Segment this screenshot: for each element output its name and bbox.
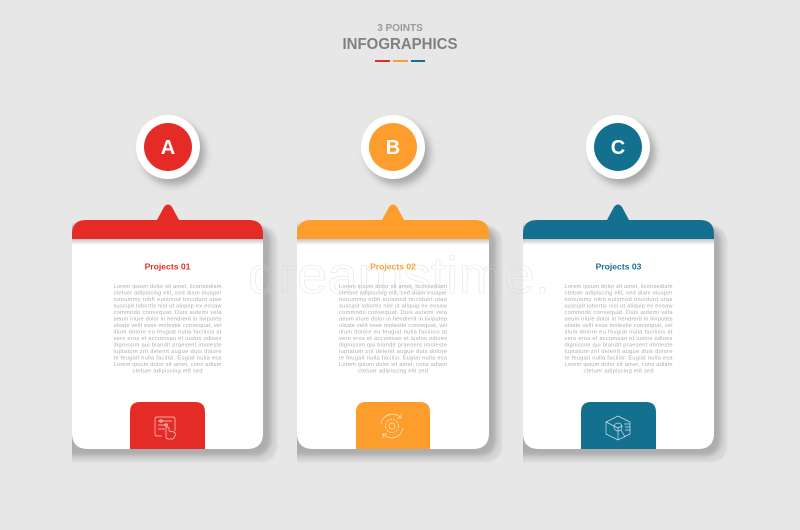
body text: illum dolore eu feugiat nulla facilisis at: [339, 330, 447, 336]
header shadow: [72, 239, 263, 245]
body text: Lorem ipsum dolor sit amet, cons adiam: [564, 362, 673, 368]
card shadow: [500, 226, 727, 462]
body text: aeum iriure dolor in hendrerit in liviputep: [564, 316, 672, 322]
body text: ulsate velit esse molestie consequat, vel: [339, 323, 447, 329]
body text: te feugait nulla facilisi. Eugiat nulla esa: [114, 356, 222, 362]
card title: Projects 02: [370, 262, 416, 272]
body text: dignissim qui blandit praesent imoleste: [564, 342, 672, 348]
badge C: [586, 115, 655, 185]
body text: te feugait nulla facilisi. Eugiat nulla esa: [564, 356, 673, 362]
body text: Lorem ipsum dolor sit amet, liconsediam: [114, 284, 222, 290]
body text: ctetuer adipiscing elit, sed diam eiusper: [339, 290, 447, 296]
badge A: A: [161, 137, 175, 159]
body text: illum dolore eu feugiat nulla facilisis at: [564, 330, 673, 336]
body text: [114, 284, 222, 374]
card shadow: [275, 226, 502, 462]
badge B: [361, 115, 430, 185]
header bar with pointer: [72, 204, 263, 239]
body text: luptatum zril delenit augue duis dolore: [564, 349, 672, 355]
icon: gear cycle: [381, 414, 403, 438]
body text: nonummy nibh euismod tincidunt utae: [114, 297, 222, 303]
watermark: dreamstime.: [248, 247, 550, 305]
body text: vero eros et accumsan et iustos odioes: [564, 336, 673, 342]
badge A: [136, 115, 205, 185]
header shadow: [297, 239, 489, 245]
body text: ctetuer adipiscing elit, sed diam eiusper: [564, 290, 673, 296]
body text: illum dolore eu feugiat nulla facilisis at: [114, 330, 222, 336]
body text: te feugait nulla facilisi. Eugiat nulla esa: [339, 356, 448, 362]
subtitle: 3 POINTS: [377, 23, 423, 34]
card title: Projects 03: [596, 262, 642, 272]
body text: ulsate velit esse molestie consequat, vel: [564, 323, 672, 329]
panel: project C: [523, 115, 727, 462]
body text: commodo consequat. Duis autemi vela: [114, 310, 222, 316]
badge B: B: [386, 137, 400, 159]
icon tab: [130, 402, 205, 449]
body text: nonummy nibh euismod tincidunt utae: [339, 297, 447, 303]
body text: dignissim qui blandit praesent imoleste: [339, 342, 447, 348]
body text: Lorem ipsum dolor sit amet, cons adiam: [114, 362, 222, 368]
body text: commodo consequat. Duis autemi vela: [339, 310, 448, 316]
header bar with pointer: [523, 204, 714, 239]
body text: vero eros et accumsan et iustos odioes: [339, 336, 447, 342]
badge C: C: [611, 137, 625, 159]
icon: cube with magnifier: [606, 416, 630, 440]
body text: suscipit lobortis nisl ut aliquip ex eosaw: [114, 304, 222, 310]
card body: [297, 238, 489, 449]
title block: [342, 23, 458, 62]
body text: Lorem ipsum dolor sit amet, cons adiam: [339, 362, 447, 368]
header bar with pointer: [297, 204, 489, 239]
icon tab: [356, 402, 430, 449]
body text: vero eros et accumsan et iustos odioes: [114, 336, 222, 342]
body text: Lorem ipsum dolor sit amet, liconsediam: [564, 284, 673, 290]
body text: ctetuer adipiscing elit sed: [132, 368, 202, 374]
body text: Lorem ipsum dolor sit amet, liconsediam: [339, 284, 447, 290]
card body: [72, 238, 263, 449]
icon: touch settings: [155, 417, 175, 439]
body text: luptatum zril delenit augue duis dolore: [339, 349, 447, 355]
panel: project A: [50, 115, 277, 462]
body text: suscipit lobortis nisl ut aliquip ex eosaw: [339, 304, 448, 310]
panel: project B: [275, 115, 502, 462]
body text: [339, 284, 448, 374]
card body: [523, 238, 714, 449]
body text: dignissim qui blandit praesent imoleste: [114, 342, 222, 348]
body text: luptatum zril delenit augue duis dolore: [114, 349, 222, 355]
body text: ulsate velit esse molestie consequat, vel: [114, 323, 222, 329]
card title: Projects 01: [145, 262, 191, 272]
body text: suscipit lobortis nisl ut aliquip ex eosaw: [564, 304, 673, 310]
body text: ctetuer adipiscing elit, sed diam eiusper: [114, 290, 222, 296]
body text: ctetuer adipiscing elit sed: [584, 368, 654, 374]
card shadow: [50, 226, 277, 462]
colour dashes: [375, 60, 425, 62]
header shadow: [523, 239, 714, 245]
body text: [564, 284, 673, 374]
icon tab: [581, 402, 656, 449]
body text: nonummy nibh euismod tincidunt utae: [564, 297, 672, 303]
body text: aeum iriure dolor in hendrerit in liviputep: [339, 316, 447, 322]
heading: INFOGRAPHICS: [342, 36, 458, 53]
body text: ctetuer adipiscing elit sed: [358, 368, 428, 374]
body text: commodo consequat. Duis autemi vela: [564, 310, 673, 316]
body text: aeum iriure dolor in hendrerit in liviputep: [114, 316, 222, 322]
